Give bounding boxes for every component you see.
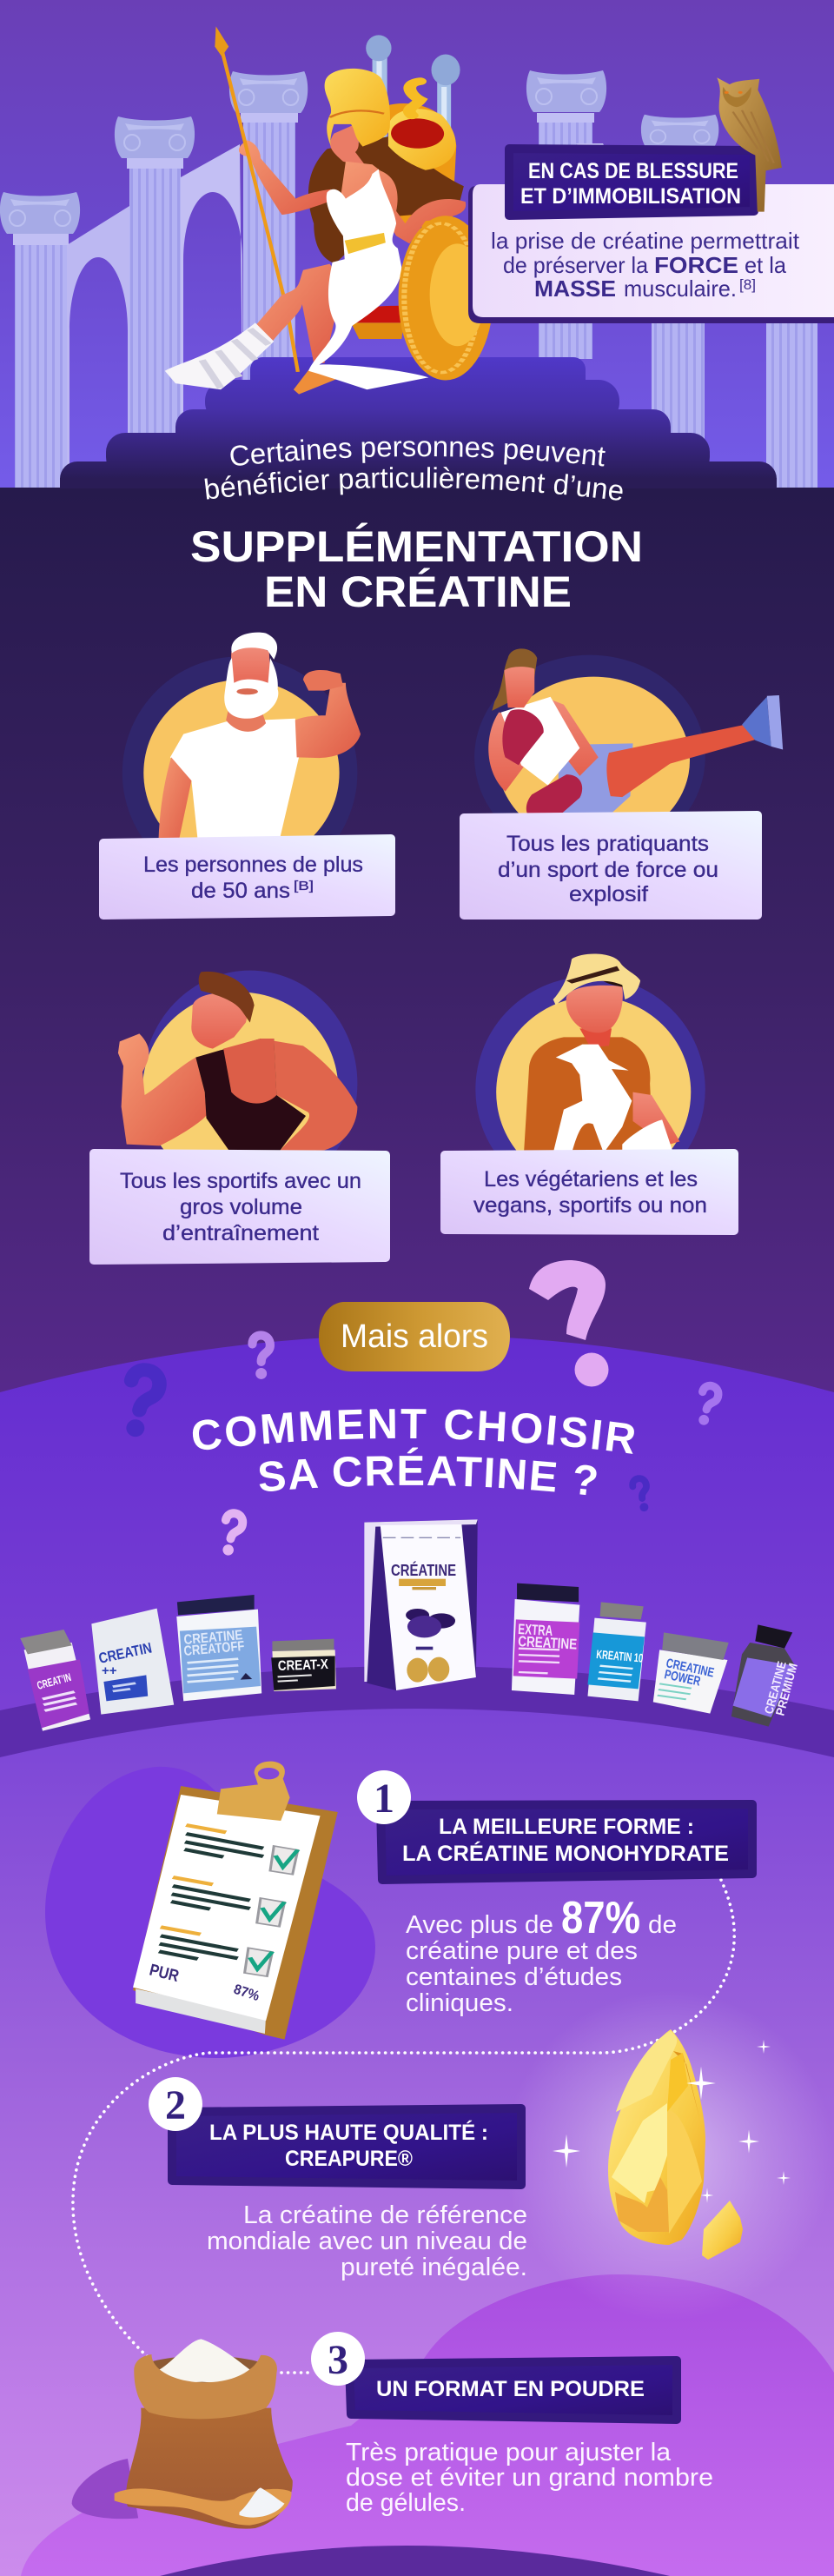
gem glow <box>504 1990 834 2320</box>
product labels: CREATINE <box>665 1656 715 1681</box>
step 2 <box>149 2077 527 2281</box>
product labels: CREATINE <box>518 1633 578 1653</box>
step 2 number: 2 <box>165 2082 186 2128</box>
product: creatoff <box>176 1595 261 1701</box>
person: bodybuilder <box>118 971 357 1197</box>
step 3 banner <box>349 2360 677 2420</box>
heading: comment choisir: COMMENT CHOISIR <box>193 1409 634 1454</box>
product labels: ++ <box>102 1663 117 1678</box>
product labels: CREATIN <box>97 1639 153 1667</box>
step 2 text <box>207 2201 527 2281</box>
sack shadow <box>72 2459 138 2519</box>
product shelf band <box>0 1666 834 1825</box>
product labels: CRÉATINE <box>391 1561 456 1579</box>
step 1 text: cliniques. <box>406 1989 513 2017</box>
product: creatine power <box>653 1632 729 1714</box>
product labels: CREAT’IN <box>36 1670 72 1692</box>
clipboard clip <box>217 1762 290 1821</box>
Athena on her throne <box>165 26 493 395</box>
small question marks <box>120 1335 720 1557</box>
product labels: CREATOFF <box>183 1639 245 1659</box>
section title: SUPPLÉMENTATION <box>190 522 643 571</box>
bandaged foot <box>165 322 274 389</box>
step 1: LA MEILLEURE FORME : <box>439 1815 694 1839</box>
dress <box>308 169 428 389</box>
product labels: POWER <box>663 1667 702 1690</box>
panel text: et la <box>745 252 787 278</box>
bottom dark arc <box>160 2546 670 2576</box>
card: vegetarians: Les végétariens et les <box>484 1167 698 1192</box>
card: strength athletes: explosif <box>569 882 648 906</box>
dotted path <box>73 1880 734 2373</box>
step 1 text: créatine pure et des <box>406 1937 638 1965</box>
person: boxer <box>474 648 783 860</box>
panel text: la prise de créatine permettrait <box>491 228 800 254</box>
greek colonnade <box>0 70 817 488</box>
step 3 number: 3 <box>328 2337 348 2383</box>
step 2: LA PLUS HAUTE QUALITÉ : <box>209 2120 488 2145</box>
gem <box>608 2029 705 2245</box>
step 2 text: pureté inégalée. <box>341 2254 527 2281</box>
card: high-volume athletes: gros volume <box>180 1195 302 1219</box>
product: central pouch <box>364 1519 478 1690</box>
spoon <box>115 2487 292 2526</box>
step 3: UN FORMAT EN POUDRE <box>376 2377 645 2401</box>
step 3 text: Très pratique pour ajuster la <box>346 2439 672 2466</box>
card: over 50: de 50 ans <box>191 879 290 903</box>
product: creatin ++ <box>91 1609 174 1715</box>
pill: mais alors <box>319 1302 510 1371</box>
podium base overlap <box>60 478 777 488</box>
panel body <box>468 186 834 323</box>
checklist row 2 <box>171 1877 285 1927</box>
step 1 number <box>357 1770 411 1824</box>
heading: comment choisir: SA CRÉATINE ? <box>259 1448 597 1495</box>
step 3 number <box>311 2332 365 2386</box>
shield <box>399 216 493 380</box>
panel text: FORCE <box>654 252 738 278</box>
step 1 text: centaines d’études <box>406 1963 622 1991</box>
injury panel <box>468 149 834 323</box>
section title: EN CRÉATINE <box>264 568 572 616</box>
panel text: [8] <box>739 276 756 293</box>
intro text <box>205 439 623 501</box>
powder <box>151 2339 256 2382</box>
step 3 text: dose et éviter un grand nombre <box>346 2464 713 2492</box>
step 1 text: Avec plus de <box>406 1911 553 1939</box>
clipboard labels: 87% <box>232 1982 261 2004</box>
chest and right arm <box>341 162 466 243</box>
panel text: musculaire. <box>624 276 737 302</box>
intro text: Certaines personnes peuvent <box>230 439 606 466</box>
product labels: CREAT-X <box>278 1657 328 1674</box>
card: strength athletes <box>464 815 758 915</box>
step 3 <box>311 2332 713 2517</box>
card: over 50: Les personnes de plus <box>143 853 363 877</box>
helmet <box>325 69 390 147</box>
sparkles <box>553 2040 791 2203</box>
step 1 banner <box>381 1804 752 1880</box>
step 1 number: 1 <box>374 1776 394 1822</box>
lower background <box>0 1709 834 2576</box>
step 3 text <box>346 2439 713 2517</box>
card: over 50: [B] <box>294 879 314 893</box>
checklist row 3 <box>159 1927 272 1976</box>
product: creatine premium <box>731 1624 795 1727</box>
step 2 text: mondiale avec un niveau de <box>207 2227 527 2255</box>
raised arm <box>239 140 336 215</box>
product labels: KREATIN 10 <box>596 1647 644 1665</box>
panel text <box>491 228 800 302</box>
card: vegetarians <box>445 1153 734 1231</box>
blob behind clipboard <box>45 1767 375 2058</box>
checklist row 1 <box>184 1825 298 1875</box>
hero background <box>0 0 834 488</box>
injury panel: ET D’IMMOBILISATION <box>520 184 741 209</box>
product labels: CREATINE <box>761 1660 789 1716</box>
belt <box>345 233 386 254</box>
sandal <box>294 363 336 395</box>
card: high-volume athletes: d’entraînement <box>162 1221 319 1245</box>
step 1 text: 87% <box>561 1893 640 1943</box>
panel text: MASSE <box>534 276 616 302</box>
step 1 text <box>406 1893 677 2017</box>
big question mark <box>529 1260 608 1387</box>
card: strength athletes: d’un sport de force ou <box>498 858 718 882</box>
panel text: de préserver la <box>503 252 649 278</box>
section title <box>190 522 643 616</box>
card: over 50 <box>103 839 391 915</box>
intro text: bénéficier particulièrement d’une <box>205 467 623 501</box>
face <box>330 124 367 168</box>
injury panel: EN CAS DE BLESSURE <box>528 159 738 183</box>
product: creat-x <box>271 1639 336 1691</box>
sack rim back <box>138 2356 271 2385</box>
product labels: PREMIUM <box>772 1662 800 1717</box>
spear <box>215 26 298 372</box>
step 2 text: La créatine de référence <box>243 2201 527 2229</box>
clipboard <box>133 1762 338 2040</box>
heading: comment choisir <box>193 1409 634 1495</box>
card: vegetarians: vegans, sportifs ou non <box>473 1193 707 1218</box>
leg <box>255 264 341 363</box>
card: high-volume athletes: Tous les sportifs avec un <box>120 1169 361 1193</box>
lower purple arch <box>0 1335 834 1825</box>
card: high-volume athletes <box>94 1153 386 1260</box>
step 2: CREAPURE® <box>285 2147 414 2171</box>
hair <box>308 136 464 264</box>
sack rim <box>134 2354 277 2419</box>
clipboard labels: PUR <box>148 1961 181 1986</box>
sack of powder <box>72 2339 293 2529</box>
step 1: LA CRÉATINE MONOHYDRATE <box>402 1841 729 1866</box>
step 2 number <box>149 2077 202 2131</box>
product labels: EXTRA <box>518 1621 553 1639</box>
product labels <box>36 1561 800 1717</box>
step 2 banner <box>172 2108 521 2185</box>
step 3 text: de gélules. <box>346 2489 466 2517</box>
product: extra creatine <box>512 1583 579 1695</box>
large bottom-right blob <box>21 2274 834 2576</box>
helmet crest <box>385 82 456 170</box>
product labels: CREATINE <box>183 1628 243 1648</box>
product: creat'in <box>20 1630 90 1731</box>
stepped podium <box>60 357 777 496</box>
throne <box>348 35 460 339</box>
clipboard labels <box>148 1961 261 2004</box>
person: over 50 <box>122 633 361 889</box>
small gem <box>702 2201 743 2260</box>
product: kreatin 10 <box>587 1602 646 1701</box>
products <box>20 1519 795 1731</box>
card: strength athletes: Tous les pratiquants <box>506 832 709 856</box>
owl <box>717 77 782 212</box>
panel heading banner <box>509 149 754 216</box>
step 1 <box>357 1770 752 2017</box>
person: farmer with lamb <box>475 953 705 1202</box>
step 1 text: de <box>648 1911 677 1939</box>
sack body <box>126 2408 293 2529</box>
dark section background <box>0 488 834 1444</box>
pill: mais alors: Mais alors <box>341 1318 488 1355</box>
